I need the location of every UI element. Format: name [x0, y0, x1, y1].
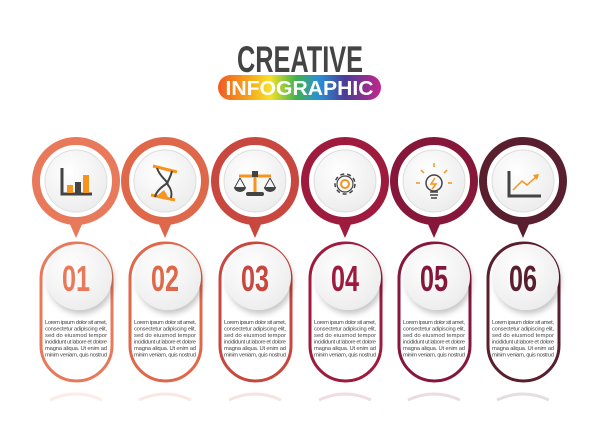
step 03: 03	[241, 258, 269, 299]
icon: hourglass	[151, 166, 177, 200]
step 02: 02	[151, 258, 179, 299]
step 06	[483, 141, 563, 381]
step 06: 06	[509, 258, 537, 299]
step 05	[394, 141, 474, 381]
body text blocks: sed do eiusmod tempor	[45, 333, 107, 339]
body text blocks: magna aliqua. Ut enim ad	[45, 346, 107, 352]
title	[218, 39, 381, 100]
body text blocks: consectetur adipiscing elit,	[45, 326, 107, 332]
step 04	[305, 141, 385, 381]
step 02	[125, 141, 205, 381]
icon: bar chart	[62, 168, 92, 194]
body text blocks: incididunt ut labore et dolore	[45, 340, 107, 346]
step 01	[36, 141, 116, 381]
step 01: 01	[62, 258, 90, 299]
body text blocks	[45, 320, 554, 358]
step 05: 05	[420, 258, 448, 299]
icon: gear	[335, 174, 355, 194]
body text blocks: Lorem ipsum dolor sit amet,	[45, 320, 107, 326]
step 03	[215, 141, 295, 381]
step 04: 04	[331, 258, 359, 299]
body text blocks: minim veniam, quis nostrud	[45, 352, 107, 358]
title: CREATIVE	[237, 39, 363, 80]
reflections	[50, 394, 549, 400]
icon: light bulb	[416, 163, 452, 198]
title: INFOGRAPHIC	[226, 78, 374, 100]
icon: scales	[234, 171, 276, 196]
icon: growth chart	[509, 171, 541, 196]
